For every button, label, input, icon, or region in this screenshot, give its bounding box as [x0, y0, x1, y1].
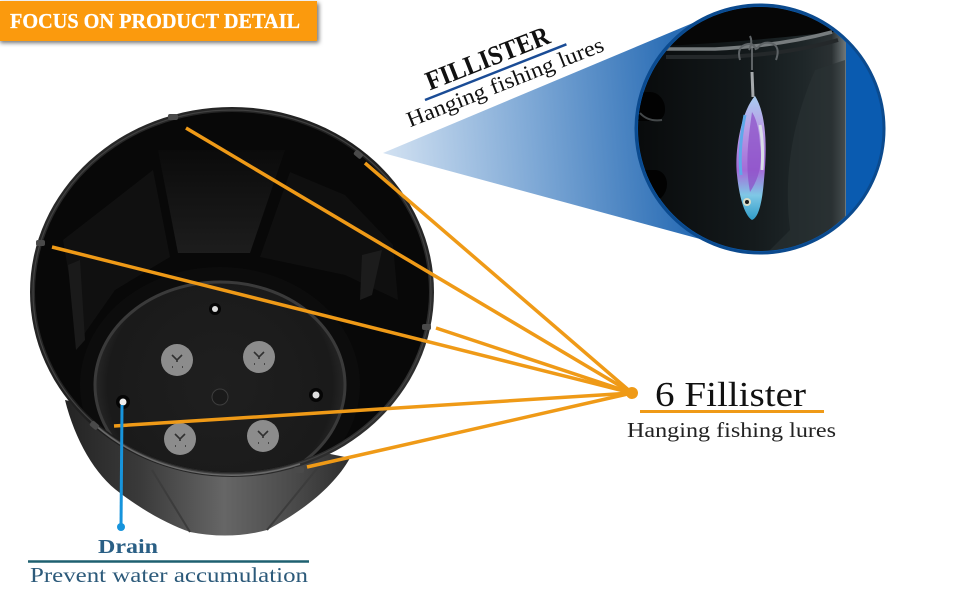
pot floor	[95, 282, 345, 488]
label: 6 fillister	[627, 375, 836, 442]
label: drain: Drain	[98, 536, 158, 558]
pot interior	[35, 112, 429, 472]
label: fillister hanging fishing lures (rotated)	[391, 3, 607, 132]
orange callout dot	[626, 387, 638, 399]
screws	[161, 341, 279, 455]
label: drain	[28, 536, 309, 587]
orange callout lines	[52, 128, 632, 467]
magnify cone	[383, 20, 760, 239]
label: fillister hanging fishing lures (rotated): FILLISTER	[421, 20, 554, 96]
blue drain pointer	[117, 405, 125, 531]
label: 6 fillister: 6 Fillister	[655, 375, 806, 414]
label: 6 fillister: Hanging fishing lures	[627, 418, 836, 442]
banner: focus on product detail	[0, 1, 317, 41]
pot rim	[30, 107, 434, 477]
inset: lure detail circle	[630, 0, 891, 260]
icon: fishing lure	[736, 36, 778, 220]
banner: focus on product detail: FOCUS ON PRODUCT DETAIL	[10, 9, 300, 33]
pot	[30, 100, 440, 536]
rim notches	[36, 114, 431, 473]
drain holes	[116, 303, 323, 409]
label: fillister hanging fishing lures (rotated): Hanging fishing lures	[403, 32, 607, 132]
label: drain: Prevent water accumulation	[30, 563, 308, 587]
pot body	[65, 400, 350, 536]
